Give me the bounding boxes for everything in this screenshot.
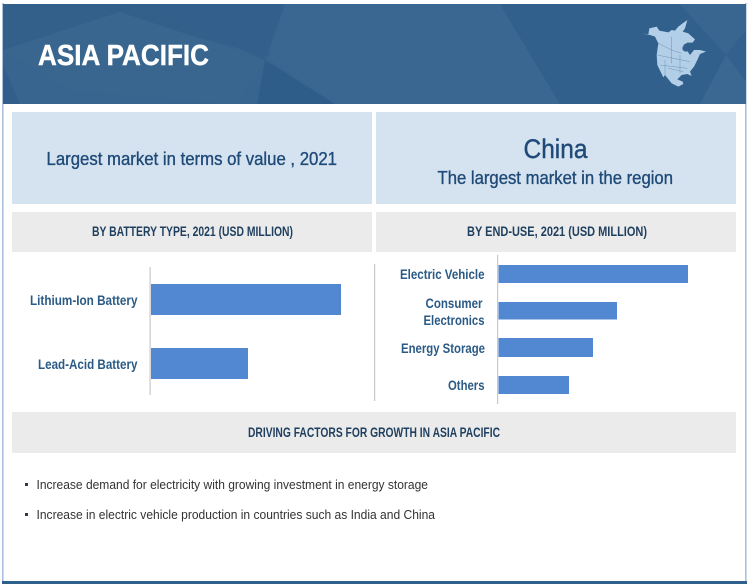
text: largest in region: The largest market in the region xyxy=(438,168,673,188)
panel: China xyxy=(376,112,736,204)
heading: by end-use: BY END-USE, 2021 (USD MILLION) xyxy=(467,224,647,239)
bar: lead-acid xyxy=(151,348,248,379)
text block: driving factors list: Increase demand for electricity with growing investment in energy storage xyxy=(36,478,428,492)
label: consumer electronics: Electronics xyxy=(424,313,484,328)
heading: by end-use xyxy=(376,212,736,252)
label: electric vehicle: Electric Vehicle xyxy=(400,267,485,282)
bar: others xyxy=(498,376,569,394)
icon: North America map xyxy=(641,20,706,87)
heading: driving factors: DRIVING FACTORS FOR GROWTH IN ASIA PACIFIC xyxy=(248,425,500,440)
title: ASIA PACIFIC xyxy=(38,40,209,72)
bar: consumer electronics xyxy=(498,302,617,320)
label: energy storage: Energy Storage xyxy=(401,341,485,356)
bar: energy storage xyxy=(498,338,593,357)
panel: largest market by value xyxy=(12,112,372,204)
label: consumer electronics xyxy=(424,296,484,328)
heading: by battery type xyxy=(12,212,372,252)
bar chart: battery type xyxy=(30,267,341,395)
heading: driving factors xyxy=(12,412,736,453)
heading: China: China xyxy=(524,134,588,164)
text block: driving factors list xyxy=(25,478,435,522)
label: lithium-ion: Lithium-Ion Battery xyxy=(30,293,138,308)
text block: driving factors list: Increase in electric vehicle production in countries such as India and China xyxy=(36,508,435,522)
bar: electric vehicle xyxy=(498,265,688,283)
heading: by battery type: BY BATTERY TYPE, 2021 (USD MILLION) xyxy=(92,224,293,239)
bar: lithium-ion xyxy=(151,284,341,315)
label: lead-acid: Lead-Acid Battery xyxy=(38,357,138,372)
bar chart: end-use xyxy=(400,255,688,404)
label: others: Others xyxy=(448,378,484,393)
text: largest market: Largest market in terms of value , 2021 xyxy=(46,149,337,169)
header banner xyxy=(3,4,746,104)
label: consumer electronics: Consumer xyxy=(426,296,483,311)
